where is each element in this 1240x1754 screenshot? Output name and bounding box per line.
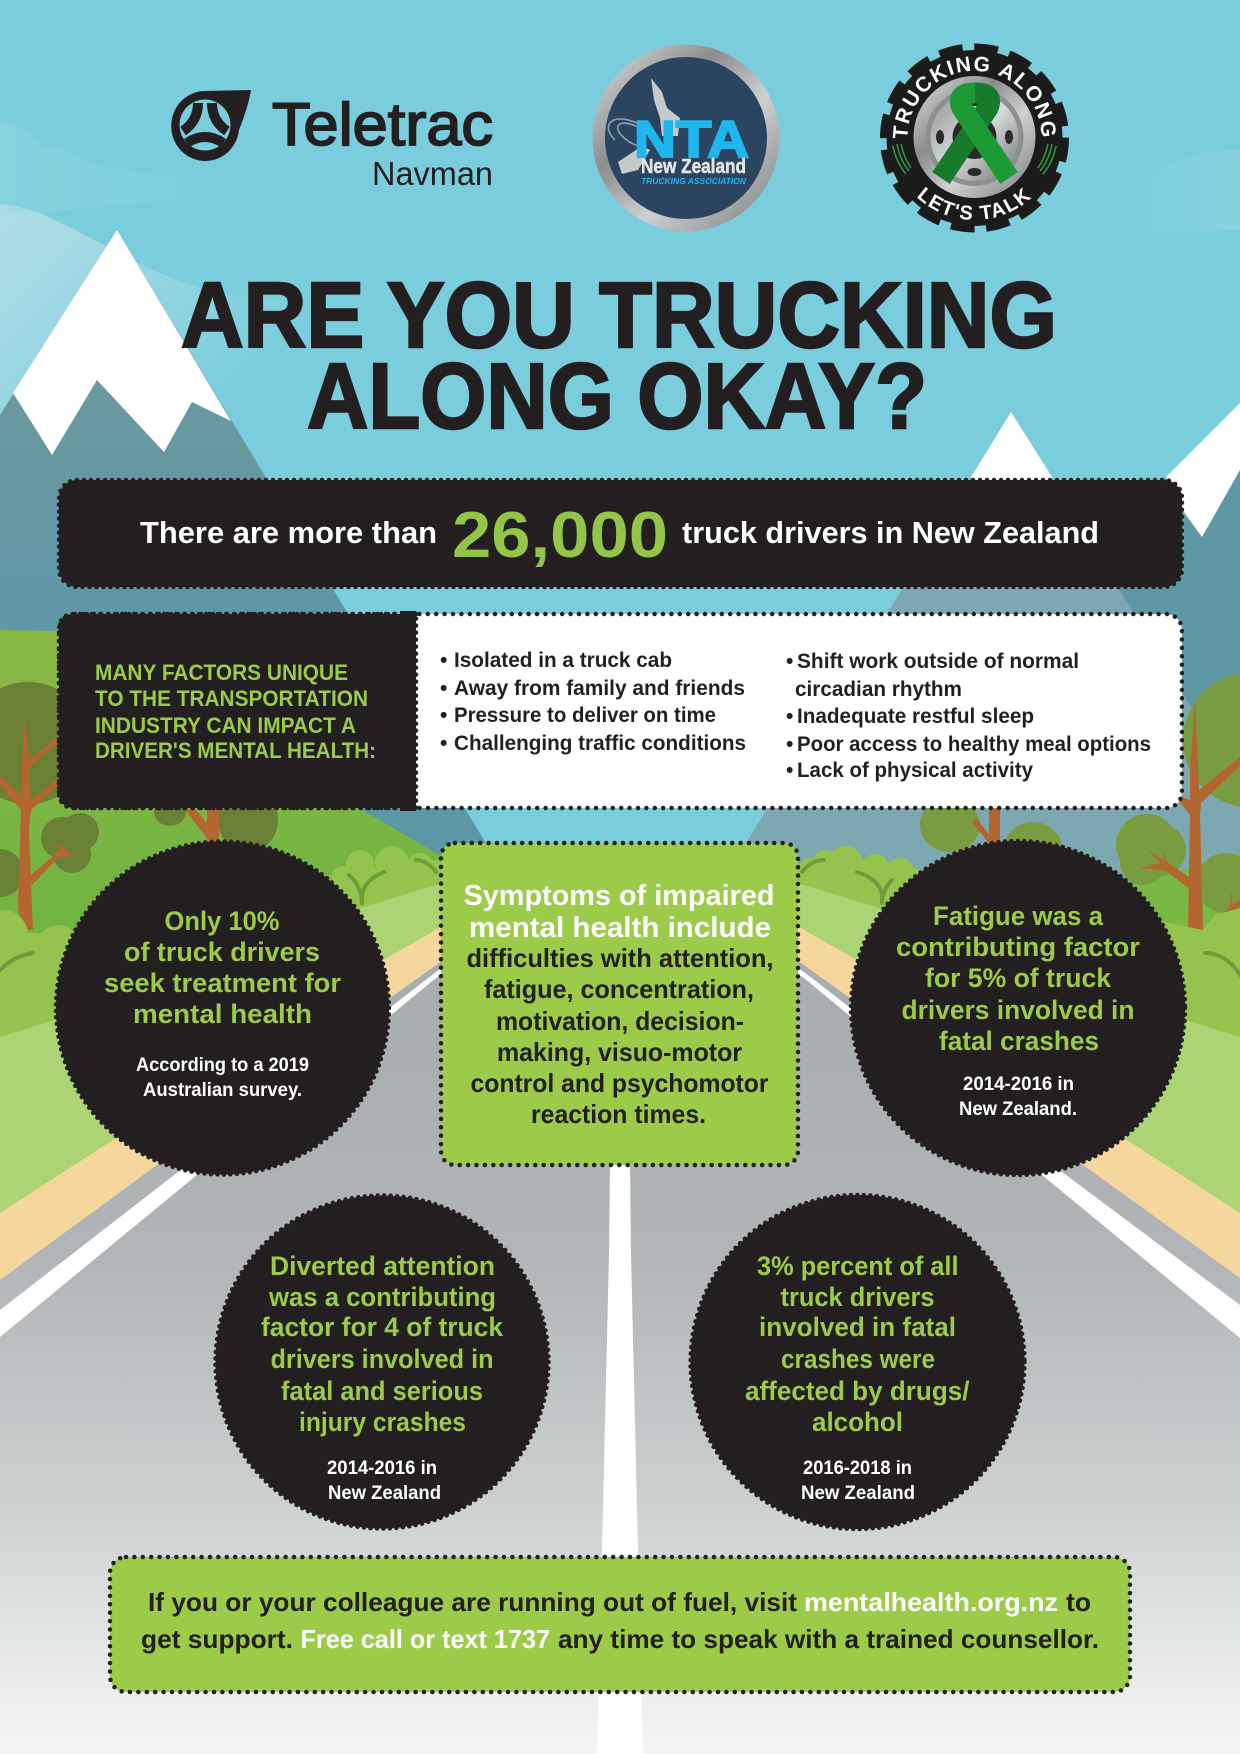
clouds — [0, 120, 1240, 450]
road — [0, 920, 1240, 1754]
bullet list right: Inadequate restful sleep — [797, 705, 1034, 728]
icon: New Zealand map — [618, 78, 680, 174]
panel: get support call to action: If you or your colleague are running out of fuel, visit — [148, 1587, 797, 1617]
road centre line — [597, 1160, 643, 1754]
circle: drugs and alcohol: 2016-2018 in — [803, 1458, 912, 1479]
bullet list right — [786, 650, 1151, 782]
circle: drugs and alcohol: 3% percent of all — [757, 1251, 958, 1281]
logo: NTA New Zealand Trucking Association — [592, 44, 780, 232]
bullet list right: • — [786, 705, 793, 728]
green ribbon — [941, 93, 1009, 178]
bullet list right: circadian rhythm — [795, 678, 962, 701]
factors heading block: INDUSTRY CAN IMPACT A — [95, 713, 356, 738]
circle: diverted attention: New Zealand — [328, 1483, 441, 1504]
left mountain — [0, 230, 520, 900]
panel: factors impacting mental health — [59, 611, 1182, 811]
circle: fatigue contributing factor: fatal crashes — [939, 1026, 1099, 1056]
bullet list left: Challenging traffic conditions — [454, 732, 746, 755]
factors heading block: MANY FACTORS UNIQUE — [95, 660, 348, 685]
circle: fatigue contributing factor: Fatigue was a — [933, 901, 1103, 931]
road right edge line — [740, 930, 1240, 1338]
right mountain snow — [1166, 403, 1240, 537]
bullet list right: Poor access to healthy meal options — [797, 733, 1151, 756]
circle: fatigue contributing factor: New Zealand. — [959, 1099, 1077, 1120]
panel: symptoms of impaired mental health: Symptoms of impaired — [464, 880, 774, 912]
circle: drugs and alcohol: New Zealand — [801, 1483, 915, 1504]
circle: drugs and alcohol: affected by drugs/ — [745, 1376, 970, 1406]
panel: 26,000 truck drivers banner: There are more than — [140, 515, 437, 550]
right light mountain — [700, 412, 1240, 918]
logo: Teletrac Navman — [171, 90, 493, 192]
circle: only 10% seek treatment: According to a 2019 — [136, 1055, 309, 1076]
logo: NTA New Zealand Trucking Association: TRUCKING ASSOCIATION — [641, 176, 747, 186]
icon: Teletrac shield — [171, 90, 251, 161]
bullet list left: • — [440, 704, 447, 727]
right dark mountain — [900, 403, 1240, 900]
title — [181, 263, 1057, 448]
panel: symptoms of impaired mental health: mental health include — [469, 912, 771, 944]
right hill — [925, 855, 1240, 1000]
background trees right — [920, 798, 1063, 882]
circle: fatigue contributing factor — [851, 841, 1185, 1175]
bullet list left: Isolated in a truck cab — [454, 649, 672, 672]
Teletrac wordmark: Teletrac — [272, 91, 493, 158]
circle: only 10% seek treatment: of truck drivers — [124, 937, 320, 967]
circle: diverted attention: 2014-2016 in — [327, 1458, 437, 1479]
circle: drugs and alcohol: truck drivers — [780, 1282, 934, 1312]
panel: 26,000 truck drivers banner: truck drivers in New Zealand — [682, 515, 1099, 550]
circle: drugs and alcohol — [690, 1195, 1024, 1529]
factors heading block — [59, 611, 416, 811]
circle: diverted attention: drivers involved in — [270, 1344, 494, 1374]
panel: get support call to action: Free call or text 1737 — [300, 1624, 550, 1654]
circle: only 10% seek treatment: Australian survey. — [143, 1080, 302, 1101]
panel: symptoms of impaired mental health: fatigue, concentration, — [484, 974, 754, 1004]
left mountain snow cap — [13, 230, 231, 455]
circle: only 10% seek treatment: Only 10% — [164, 906, 280, 936]
bullet list left: • — [440, 649, 447, 672]
circle: diverted attention: injury crashes — [299, 1407, 466, 1437]
bushes — [0, 846, 1240, 1100]
gear — [886, 50, 1062, 226]
circle: diverted attention: Diverted attention — [270, 1251, 495, 1281]
right mountain small snow cap — [971, 412, 1052, 495]
panel: get support call to action: mentalhealth.org.nz — [804, 1587, 1058, 1617]
bullet list left: Pressure to deliver on time — [454, 704, 716, 727]
Navman wordmark: Navman — [372, 155, 493, 192]
circle: fatigue contributing factor: 2014-2016 in — [963, 1074, 1074, 1095]
bullet list right: Lack of physical activity — [797, 759, 1033, 782]
title: ALONG OKAY? — [307, 344, 927, 448]
bullet list right: • — [786, 650, 793, 673]
circle: drugs and alcohol: involved in fatal — [759, 1312, 956, 1342]
right big tree — [1116, 672, 1240, 932]
panel: symptoms of impaired mental health: reaction times. — [531, 1099, 706, 1129]
background trees left — [154, 788, 278, 852]
sand shoulder — [0, 890, 1240, 1400]
circle: fatigue contributing factor: for 5% of truck — [925, 963, 1111, 993]
panel: symptoms of impaired mental health — [441, 843, 798, 1165]
panel: get support call to action — [110, 1557, 1130, 1692]
circle: diverted attention: factor for 4 of truck — [261, 1312, 503, 1342]
panel: symptoms of impaired mental health: control and psychomotor — [470, 1068, 768, 1098]
left big tree — [0, 682, 99, 930]
panel: symptoms of impaired mental health: difficulties with attention, — [466, 943, 774, 973]
grass verge — [0, 865, 1240, 1400]
bullet list left: • — [440, 732, 447, 755]
bullet list left: Away from family and friends — [454, 677, 745, 700]
wheel — [914, 76, 1036, 198]
panel: 26,000 truck drivers banner — [59, 480, 1182, 587]
circle: diverted attention: fatal and serious — [281, 1376, 483, 1406]
bullet list right: Shift work outside of normal — [797, 650, 1079, 673]
title: ARE YOU TRUCKING — [181, 263, 1057, 367]
circle: diverted attention — [216, 1196, 548, 1528]
circle: diverted attention: was a contributing — [268, 1282, 496, 1312]
badge text: Trucking Along: TRUCKING ALONG — [892, 56, 1056, 138]
grass blades — [0, 860, 1240, 975]
bullet list left: • — [440, 677, 447, 700]
bullet list left — [440, 649, 746, 755]
circle: drugs and alcohol: crashes were — [781, 1344, 935, 1374]
factors heading block: DRIVER'S MENTAL HEALTH: — [95, 738, 376, 763]
circle: only 10% seek treatment: seek treatment for — [104, 968, 341, 998]
bullet list right: • — [786, 759, 793, 782]
circle: drugs and alcohol: alcohol — [812, 1407, 903, 1437]
left hill — [0, 630, 620, 960]
panel: symptoms of impaired mental health: making, visuo-motor — [497, 1037, 742, 1067]
badge text: Let's Talk: LET'S TALK — [917, 186, 1032, 220]
logo: NTA New Zealand Trucking Association: NTA — [634, 111, 749, 169]
logo: NTA New Zealand Trucking Association: New Zealand — [641, 156, 746, 178]
panel: symptoms of impaired mental health: motivation, decision- — [496, 1006, 744, 1036]
circle: fatigue contributing factor: drivers involved in — [902, 995, 1134, 1025]
big number: 26,000 — [452, 498, 668, 571]
logo: Trucking Along Let's Talk badge — [880, 44, 1069, 232]
circle: fatigue contributing factor: contributing factor — [896, 932, 1140, 962]
factors heading block: TO THE TRANSPORTATION — [95, 686, 368, 711]
panel: get support call to action: get support. — [141, 1624, 293, 1654]
panel: get support call to action: to — [1066, 1587, 1091, 1617]
grass marks — [893, 144, 1056, 174]
circle: only 10% seek treatment — [56, 842, 389, 1174]
swirl — [608, 119, 645, 148]
road left edge line — [0, 930, 500, 1337]
circle: only 10% seek treatment: mental health — [133, 999, 312, 1029]
panel: get support call to action: any time to speak with a trained counsellor. — [558, 1624, 1099, 1654]
bullet list right: • — [786, 733, 793, 756]
